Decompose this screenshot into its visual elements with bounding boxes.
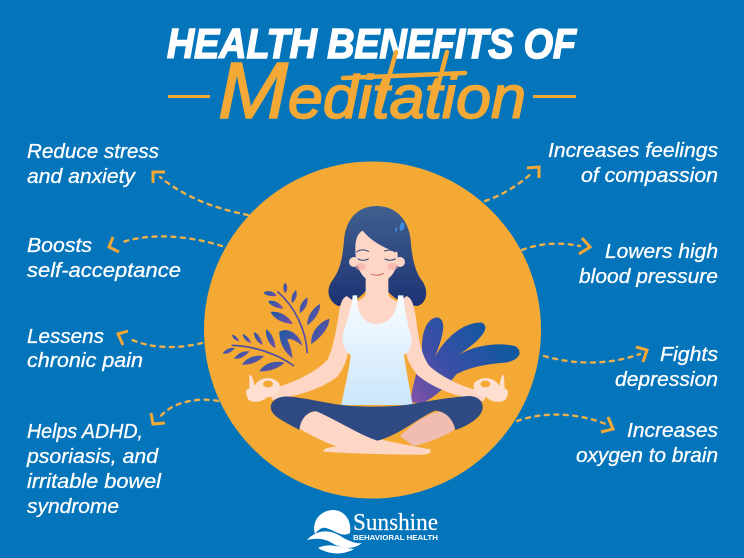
leggings bbox=[271, 396, 483, 441]
benefit: fights depression: Fights bbox=[660, 343, 718, 366]
arrow: increases compassion bbox=[485, 167, 539, 201]
eyes, brows, mouth bbox=[357, 250, 395, 260]
benefit: lowers high blood pressure bbox=[579, 240, 718, 288]
benefit: lessens chronic pain bbox=[27, 325, 143, 372]
benefit: helps ADHD, psoriasis, IBS bbox=[26, 420, 163, 518]
crossed calves bbox=[400, 412, 455, 446]
cheeks bbox=[355, 263, 398, 270]
illustration: meditating woman with plants bbox=[223, 206, 520, 455]
title: Health Benefits of: HEALTH BENEFITS OF bbox=[167, 20, 577, 67]
orange circle bbox=[204, 162, 541, 498]
benefit: lowers high blood pressure: Lowers high bbox=[605, 240, 718, 263]
benefit: fights depression: depression bbox=[615, 368, 718, 391]
logo: Sunshine Behavioral Health bbox=[307, 510, 438, 553]
benefit: reduce stress and anxiety bbox=[27, 140, 159, 188]
benefit: boosts self-acceptance: Boosts bbox=[27, 234, 92, 257]
hand right bbox=[474, 375, 508, 402]
benefit: increases feelings of compassion bbox=[548, 139, 718, 187]
benefit: helps ADHD, psoriasis, IBS: psoriasis, and bbox=[26, 445, 159, 468]
benefit: lessens chronic pain: chronic pain bbox=[27, 349, 143, 372]
benefit: increases feelings of compassion: Increases feelings bbox=[548, 139, 718, 162]
arrow: boosts self-acceptance bbox=[109, 236, 222, 252]
arrow: lowers blood pressure bbox=[522, 238, 590, 254]
arrow: helps ADHD bbox=[151, 400, 218, 424]
hair highlight bbox=[395, 222, 405, 232]
arm left bbox=[271, 296, 357, 400]
icon: sun and waves bbox=[307, 510, 362, 553]
title: Meditation script: Meditation bbox=[218, 46, 526, 135]
benefit: fights depression bbox=[615, 343, 718, 391]
benefit: boosts self-acceptance: self-acceptance bbox=[27, 259, 181, 282]
benefit: increases oxygen to brain bbox=[576, 419, 718, 467]
icon: right leaf bbox=[411, 317, 520, 403]
tank top bbox=[341, 295, 413, 405]
neck and chest bbox=[349, 277, 404, 327]
wordmark: Sunshine bbox=[353, 510, 438, 536]
tagline: BEHAVIORAL HEALTH bbox=[353, 533, 438, 542]
icon: left plant bbox=[223, 283, 329, 371]
benefit: boosts self-acceptance bbox=[27, 234, 181, 282]
benefit: lessens chronic pain: Lessens bbox=[27, 325, 104, 348]
benefit: increases oxygen to brain: Increases bbox=[627, 419, 718, 442]
arrow: lessens chronic pain bbox=[118, 331, 202, 347]
benefit: lowers high blood pressure: blood pressure bbox=[579, 265, 718, 288]
benefit: increases oxygen to brain: oxygen to brain bbox=[576, 444, 718, 467]
title rule left bbox=[168, 95, 210, 98]
arrow: reduce stress bbox=[153, 172, 248, 215]
hair bbox=[328, 206, 426, 306]
title rule right bbox=[533, 95, 576, 98]
benefit: reduce stress and anxiety: and anxiety bbox=[27, 165, 137, 188]
benefit: increases feelings of compassion: of compassion bbox=[581, 164, 718, 187]
benefit: helps ADHD, psoriasis, IBS: Helps ADHD, bbox=[27, 420, 143, 443]
arrow: increases oxygen bbox=[517, 415, 613, 432]
benefit: helps ADHD, psoriasis, IBS: irritable bowel bbox=[27, 470, 163, 493]
hand left bbox=[246, 375, 280, 402]
arrow: fights depression bbox=[544, 347, 647, 363]
arm right bbox=[397, 296, 487, 401]
benefit: reduce stress and anxiety: Reduce stress bbox=[27, 140, 159, 163]
benefit: helps ADHD, psoriasis, IBS: syndrome bbox=[27, 495, 119, 518]
face bbox=[349, 231, 405, 285]
